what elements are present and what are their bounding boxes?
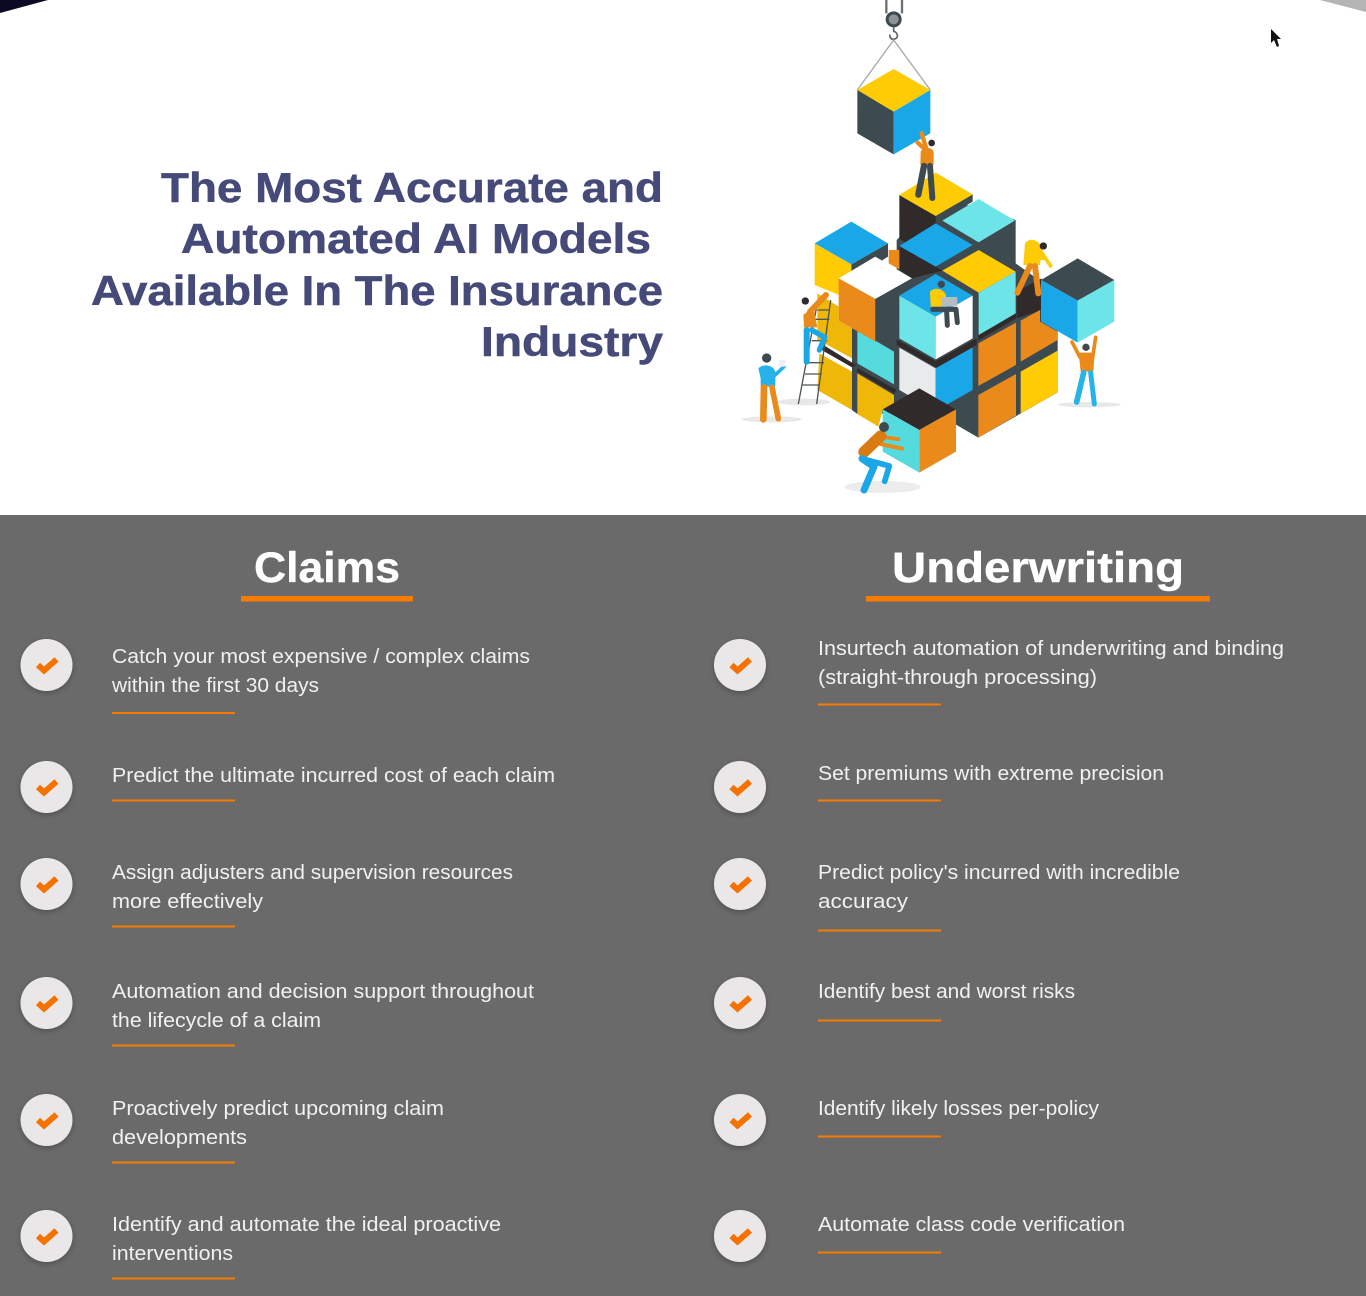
claims item 6 [20,1210,501,1280]
underwriting item 1 [714,638,1284,706]
icon: mouse cursor [1271,29,1281,47]
crouching figure [862,422,902,490]
centre cube [899,274,973,317]
claims item 4: the lifecycle of a claim [112,1010,321,1032]
underwriting item 4: Identify best and worst risks [818,981,1075,1003]
white top cube [839,257,912,299]
illustration: people building a giant cube [742,0,1121,493]
panel: claims [20,544,555,1280]
crane hook and hanging cube [857,0,930,154]
underwriting item 4 [714,977,1075,1029]
ladder [798,300,831,404]
right held cube [1041,258,1114,301]
claims item 3: more effectively [112,891,263,913]
figure on ladder [802,295,826,362]
underwriting item 5: Identify likely losses per-policy [818,1098,1099,1120]
underwriting item 6: Automate class code verification [818,1214,1125,1236]
upper left block [815,243,851,300]
yellow and cyan cube [942,271,979,335]
laptop figure [930,281,957,325]
cube base [852,200,1058,438]
title: The Most Accurate and [161,164,663,211]
figure top-right head and shoulders [1024,242,1047,260]
underwriting item 3: accuracy [818,891,908,913]
claims item 6: Identify and automate the ideal proactive [112,1214,501,1236]
cube structure [742,173,1121,493]
claims item 1: Catch your most expensive / complex claims [112,646,530,668]
heading: Underwriting: Underwriting [892,544,1184,592]
title [91,164,664,365]
top-left corner shape [0,0,48,13]
underwriting item 1: (straight-through processing) [818,667,1097,689]
underwriting item 6 [714,1210,1125,1262]
underwriting item 2: Set premiums with extreme precision [818,763,1164,785]
claims item 4: Automation and decision support throughout [112,981,534,1003]
figure with clipboard [758,353,785,419]
claims item 3 [20,858,513,928]
heading: Underwriting [866,544,1210,602]
panel: features background [0,515,1366,1296]
front cube [883,388,956,430]
figure reaching up to hanging cube [918,133,1047,260]
claims item 5 [20,1094,444,1164]
underwriting item 1: Insurtech automation of underwriting and binding [818,638,1284,660]
title: Available In The Insurance [91,267,663,314]
figure lifting right cube [1072,337,1096,404]
right side faces [1017,278,1042,318]
ground shadows [742,416,802,422]
claims item 1 [20,639,530,714]
claims item 4 [20,977,534,1046]
underwriting item 5 [714,1094,1099,1146]
claims item 5: developments [112,1127,247,1149]
claims item 3: Assign adjusters and supervision resources [112,862,513,884]
title: Automated AI Models [181,215,651,262]
walking figure on top [1017,240,1051,293]
claims item 1: within the first 30 days [111,675,319,697]
underwriting item 2 [714,761,1164,813]
underwriting item 3: Predict policy's incurred with incredible [818,862,1180,884]
panel: underwriting [714,544,1284,1262]
left side faces [817,293,852,358]
underwriting item 3 [714,858,1180,932]
claims item 6: interventions [112,1243,233,1265]
white and blue cube [899,348,936,411]
claims item 2: Predict the ultimate incurred cost of each claim [112,765,555,787]
heading: Claims: Claims [254,544,400,592]
heading: Claims [241,544,413,602]
title: Industry [481,318,664,365]
top-right corner shape [1320,0,1366,12]
claims item 2 [20,761,555,813]
claims item 5: Proactively predict upcoming claim [112,1098,444,1120]
